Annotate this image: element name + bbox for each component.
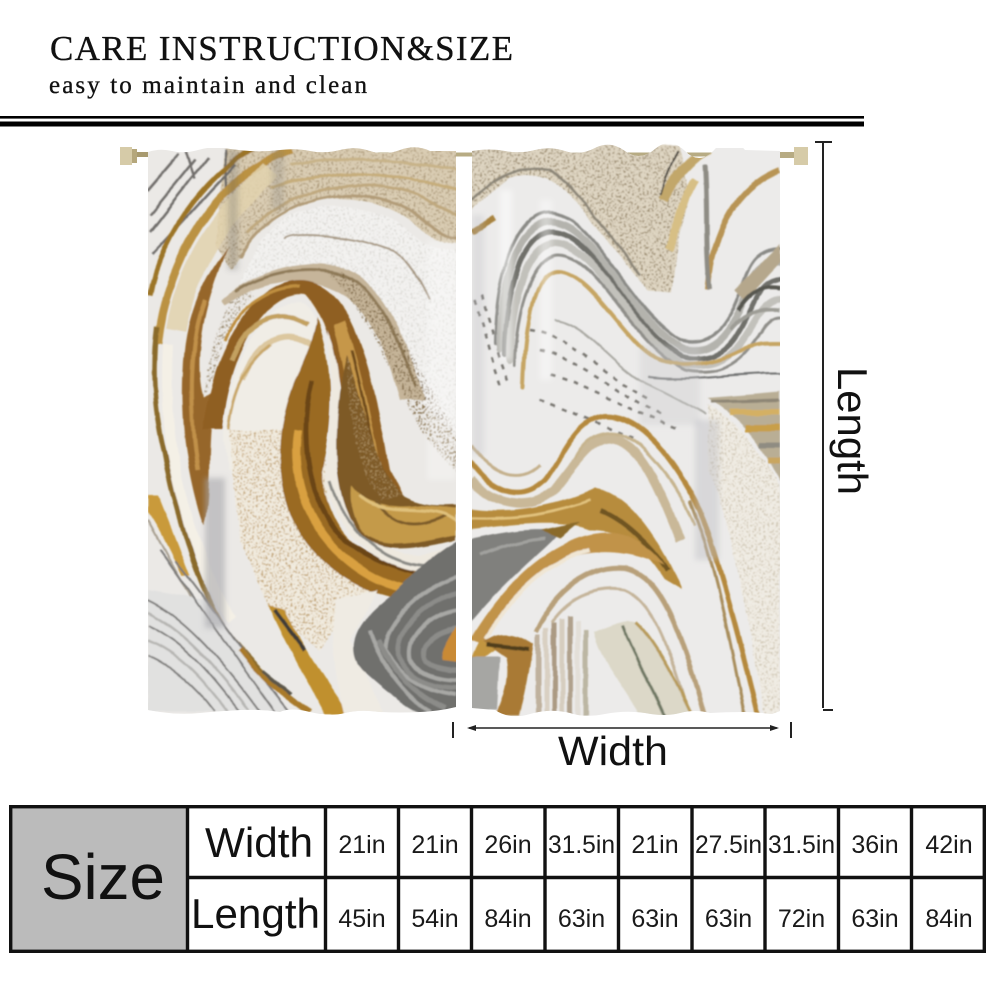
- upper gold band: [468, 488, 682, 590]
- vertical stripes: [536, 568, 705, 716]
- inner brown sweep: [280, 318, 429, 600]
- left gold flare: [148, 495, 190, 575]
- main arch: [203, 281, 405, 500]
- panel: right curtain: [468, 145, 780, 716]
- size table: [11, 807, 984, 951]
- curtain rod: [120, 147, 808, 165]
- lower gold band: [470, 533, 665, 645]
- header rule: [0, 116, 864, 126]
- row label: width: Width: [205, 819, 313, 866]
- gray blob: [354, 540, 460, 715]
- gray wave stripes: [495, 213, 780, 415]
- right side tan band: [735, 245, 780, 300]
- gray triangle: [468, 530, 560, 625]
- length label: Length: [829, 367, 876, 495]
- size label: Size: [41, 841, 165, 913]
- width dimension arrow: [453, 722, 791, 738]
- gold swirl: [470, 416, 758, 716]
- width values: 27.5in: [695, 831, 762, 859]
- length values: 45in: [338, 905, 386, 933]
- orange accent: [442, 625, 458, 662]
- row label: length: Length: [191, 890, 320, 937]
- length values: [338, 905, 973, 933]
- length values: 63in: [851, 905, 899, 933]
- length values: 84in: [484, 905, 532, 933]
- width values: 21in: [338, 831, 386, 859]
- width values: 31.5in: [548, 831, 615, 859]
- upper left streaks: [148, 150, 235, 255]
- width label: Width: [558, 728, 668, 774]
- length values: 63in: [631, 905, 679, 933]
- inner white: [222, 314, 318, 430]
- length dimension line: [815, 142, 833, 710]
- length values: 72in: [778, 905, 825, 933]
- brown mass: [337, 355, 456, 548]
- subtitle: easy to maintain and clean: [49, 72, 368, 99]
- width values: [338, 831, 973, 859]
- bottom left stripes: [148, 590, 290, 712]
- width values: 21in: [631, 831, 679, 859]
- width values: 26in: [484, 831, 532, 859]
- top sand texture: [215, 145, 460, 270]
- length values: 54in: [411, 905, 459, 933]
- left dashed speckle: [475, 295, 680, 440]
- fold shading: [472, 190, 719, 560]
- width values: 36in: [851, 831, 899, 859]
- width values: 42in: [925, 831, 973, 859]
- length values: 63in: [558, 905, 605, 933]
- top sand texture: [468, 145, 690, 292]
- upper gold arcs: [150, 147, 255, 295]
- bottom gold streak: [268, 605, 350, 715]
- title: CARE INSTRUCTION&SIZE: [50, 29, 513, 68]
- brown crescent: [182, 247, 228, 525]
- fold shadows: [205, 150, 456, 628]
- brown bottom knot: [483, 635, 534, 716]
- length values: 63in: [705, 905, 752, 933]
- green veined area: [594, 621, 692, 716]
- table grid: [11, 807, 984, 951]
- panel: left curtain: [148, 145, 460, 715]
- gold blob: [352, 485, 456, 544]
- white area under arcs: [240, 207, 460, 440]
- top right gold streaks: [660, 148, 780, 290]
- right speckled wedge: [708, 405, 780, 716]
- top arc streaks: [240, 160, 458, 258]
- white bottom patch: [332, 589, 378, 714]
- white between: [325, 330, 456, 572]
- width values: 21in: [411, 831, 459, 859]
- lower right stripes: [708, 392, 780, 482]
- width values: 31.5in: [768, 831, 835, 859]
- bottom gray block: [468, 657, 500, 710]
- lower speckled column: [233, 456, 370, 634]
- length values: 84in: [925, 905, 973, 933]
- size header cell: [11, 807, 186, 951]
- speckled band inside arcs: [204, 285, 255, 395]
